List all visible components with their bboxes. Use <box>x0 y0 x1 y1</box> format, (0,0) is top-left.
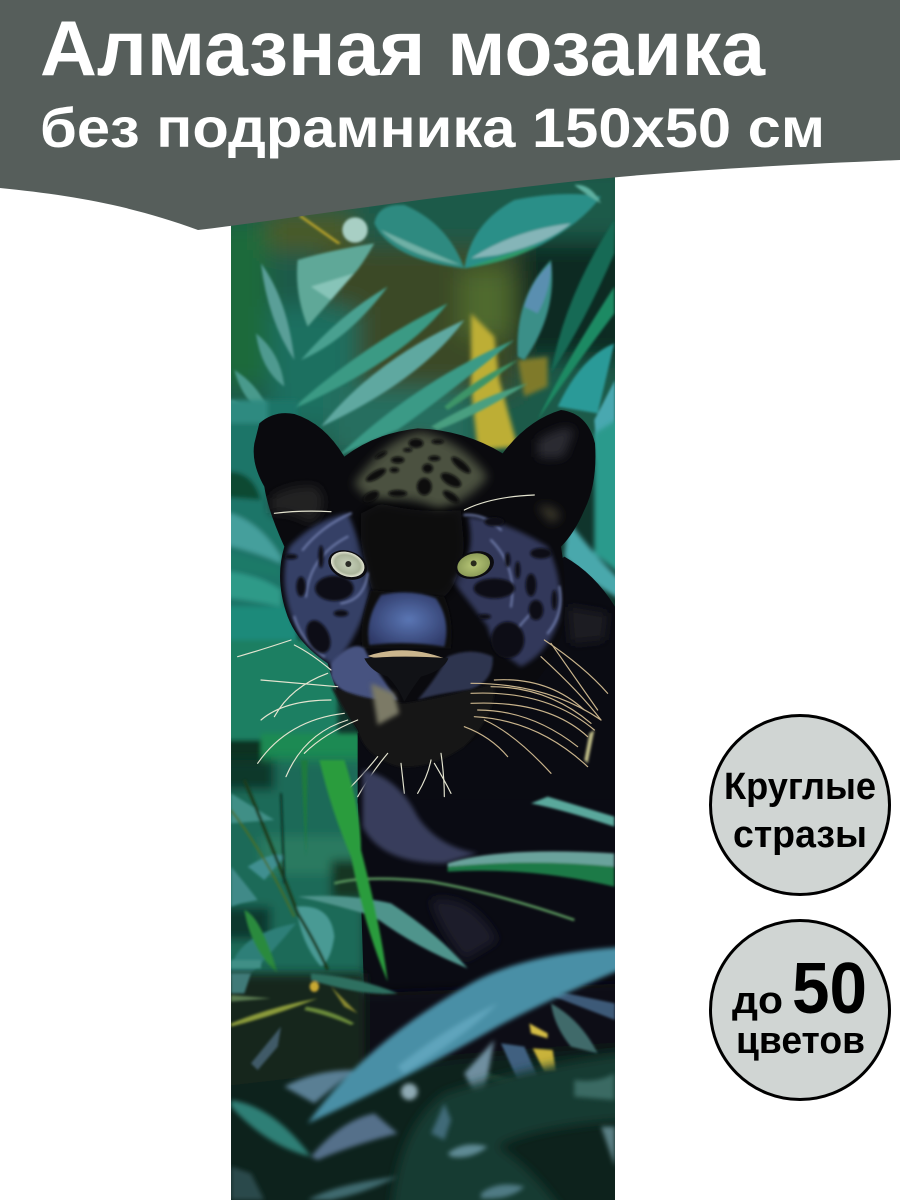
nose bridge outline <box>361 590 441 627</box>
body shoulder behind head <box>358 557 615 803</box>
left cheek blue fur <box>284 513 371 667</box>
header banner <box>0 0 900 230</box>
badge: round rhinestones <box>710 716 890 894</box>
forehead rosettes <box>361 439 473 505</box>
right eye <box>456 551 494 579</box>
muzzle <box>331 646 398 700</box>
side foliage around the head <box>231 398 615 768</box>
subtitle: без подрамника 150х50 см <box>40 96 825 159</box>
badge: up to 50 colours <box>710 920 890 1100</box>
forehead olive fur <box>354 432 488 510</box>
bottom foliage <box>218 947 628 1200</box>
whiskers <box>238 495 608 797</box>
upper foliage <box>231 178 615 458</box>
badge: up to 50 colours: цветов <box>736 1020 865 1062</box>
badge: up to 50 colours: до <box>732 980 783 1022</box>
lower-middle foreground: body and leaves <box>231 760 615 1000</box>
pale fur arcs <box>294 513 560 657</box>
badge: up to 50 colours: 50 <box>792 949 867 1029</box>
panther head <box>238 410 615 803</box>
head silhouette with ears <box>254 410 595 767</box>
right cheek blue fur <box>451 517 560 667</box>
badge: round rhinestones: Круглые <box>724 766 876 808</box>
lower face <box>331 683 495 767</box>
left ear highlights <box>271 486 323 523</box>
body below head <box>358 799 615 1000</box>
nose <box>364 656 448 674</box>
lower-middle foliage backdrop <box>231 754 364 982</box>
title: Алмазная мозаика <box>40 4 766 92</box>
cheek markings <box>284 517 557 658</box>
left eye <box>328 550 367 580</box>
badge: round rhinestones: стразы <box>733 814 867 856</box>
right ear highlights <box>538 428 574 458</box>
dark forehead centre <box>361 503 464 597</box>
panel: panther diamond mosaic picture <box>231 177 615 1200</box>
nose tan rim <box>368 650 443 658</box>
nose bridge <box>368 592 446 647</box>
